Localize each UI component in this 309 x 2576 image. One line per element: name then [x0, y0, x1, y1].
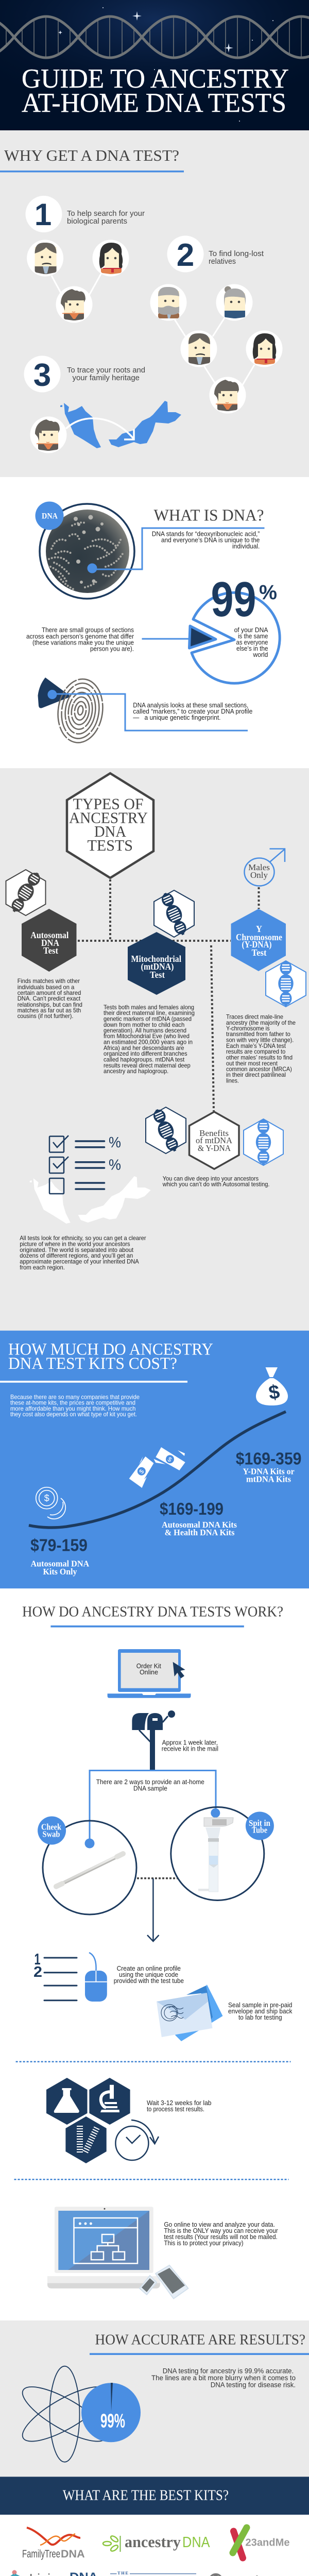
map: white ethnicity regions [30, 1176, 151, 1224]
title [22, 64, 289, 118]
icon: petri dish [40, 504, 134, 599]
icon: males only symbol [244, 849, 285, 886]
logo: Genographic Project [101, 2570, 197, 2576]
text: genome variations: across each person’s genome that differ [26, 633, 134, 640]
connector from dish to heading [88, 528, 265, 572]
icon: wedge and fingerprint [38, 676, 248, 745]
chart: 99 percent pie: else’s in the [236, 645, 268, 652]
step: create profile: 2 [33, 1964, 42, 1980]
text: genome variations [26, 626, 134, 652]
logo: 23andMe: 23andMe [245, 2537, 289, 2549]
icon: ethnicity checklist [49, 1134, 121, 1194]
logo: Living DNA [8, 2570, 98, 2576]
panel: what is DNA [0, 477, 309, 768]
logo: FamilyTreeDNA [22, 2528, 85, 2560]
text: wait for results: Wait 3-12 weeks for lab [147, 2099, 212, 2107]
text: mitochondrial description: down from mother to child each [104, 1021, 184, 1028]
heading: best kits: WHAT ARE THE BEST KITS? [63, 2488, 229, 2504]
icon: ethnicity checklist: % [109, 1157, 121, 1174]
family tree: grandparents to child [150, 284, 282, 413]
Y chromosome test hexagon: Test [251, 947, 267, 958]
text: mitochondrial description: Tests both males and females along [104, 1004, 194, 1011]
text: Y-DNA description: Traces direct male-line [226, 1013, 283, 1021]
text: autosomal description: cousins (if not further). [18, 1012, 73, 1020]
logo: Genographic Project: THE [117, 2570, 128, 2575]
text: autosomal description: relationships, but can find [18, 1001, 82, 1008]
mitochondrial test hexagon: (mtDNA) [141, 961, 174, 972]
icon: coins [36, 1487, 65, 1519]
text: DNA definition: individual. [232, 543, 260, 550]
text: DNA analysis [133, 702, 252, 721]
text: go online [164, 2221, 278, 2247]
text: accuracy: The lines are a bit more blurry when it comes to [151, 2374, 296, 2382]
autosomal test hexagon: DNA [41, 938, 59, 948]
step: order kit laptop [108, 1649, 191, 1698]
text: DNA definition [152, 531, 260, 550]
heading: types hexagon [67, 773, 153, 878]
price: autosomal only: Autosomal DNA [31, 1559, 90, 1569]
icon: autosomal DNA hexagon [6, 869, 45, 916]
Y chromosome test hexagon: Y [256, 924, 262, 934]
text: DNA analysis: a unique genetic fingerprint. [144, 714, 220, 721]
step: spit in tube [171, 1807, 274, 1900]
text: genome variations: person you are). [90, 645, 134, 652]
step: create profile: Create an online profile [117, 1965, 181, 1972]
text: mitochondrial description: an estimated 200,000 years ago in [104, 1039, 193, 1046]
step: two ways connector [90, 1770, 216, 1843]
text: ethnicity description [20, 1234, 146, 1271]
icon: benefits mtDNA hexagon [146, 1107, 186, 1154]
arrow: swab and tube to profile [137, 1878, 177, 1941]
icon: bills: $ [138, 1468, 146, 1475]
Y chromosome test hexagon: Chromosome [236, 932, 282, 942]
text: DNA analysis: DNA analysis looks at these small sections, [133, 702, 248, 709]
chart: 99 percent pie: % [259, 581, 277, 604]
chart: 99 percent circle: 99% [100, 2411, 125, 2432]
benefits hexagon: of mtDNA [196, 1136, 233, 1145]
icon: phones [140, 2265, 188, 2299]
step: two ways connector: There are 2 ways to provide an at-home [96, 1778, 204, 1786]
text: benefits description [162, 1175, 270, 1188]
panel: best kits heading band [0, 2477, 309, 2515]
text: DNA definition: and everyone’s DNA is unique to the [161, 537, 260, 544]
text: accuracy: DNA testing for disease risk. [211, 2380, 296, 2388]
icon: ethnicity checklist: % [109, 1134, 121, 1151]
reason 3: To trace your roots and [67, 366, 145, 375]
price: autosomal and health [160, 1499, 237, 1537]
heading: how much do kits cost: HOW MUCH DO ANCESTRY [8, 1340, 213, 1359]
text: accuracy: DNA testing for ancestry is 99.9% accurate. [163, 2367, 294, 2375]
text: Y-DNA description: Each male’s Y-DNA test [226, 1042, 286, 1049]
icon: stars [36, 7, 273, 122]
reason 1 [26, 196, 145, 232]
icon: atom orbits [15, 2366, 114, 2462]
panel: cost of kits [0, 1331, 309, 1588]
step: view results laptop [47, 2207, 160, 2289]
panel: how tests work [0, 1588, 309, 2320]
icon: mitochondrial DNA hexagon [154, 890, 194, 938]
reason 1: 1 [35, 197, 52, 232]
logo: FamilyTreeDNA: FamilyTree [22, 2548, 60, 2560]
icon: bills: $ [166, 1455, 173, 1464]
benefits hexagon [190, 1112, 239, 1169]
autosomal test hexagon: Autosomal [30, 930, 68, 940]
price: Y-DNA or mtDNA: mtDNA Kits [246, 1475, 291, 1484]
badge: DNA [35, 502, 64, 530]
icon: benefits Y-DNA hexagon [244, 1119, 283, 1165]
heading: types hexagon: TYPES OF [73, 795, 144, 813]
text: Y-DNA description: other males’ results to find [226, 1054, 293, 1061]
chart: 99 percent pie: is the same [238, 633, 268, 640]
text: go online: This is the ONLY way you can receive your [164, 2227, 278, 2234]
reason 3: your family heritage [72, 374, 140, 382]
heading: types hexagon: TESTS [88, 836, 133, 854]
mitochondrial test hexagon: Mitochondrial [131, 954, 181, 964]
text: DNA analysis: — [133, 714, 140, 721]
reason 2 [167, 236, 264, 273]
reason 1: biological parents [67, 217, 127, 226]
text: autosomal description: matches as far out as 5th [18, 1007, 81, 1014]
chart: rising price curve [29, 1412, 286, 1528]
chart: 99 percent circle [81, 2383, 141, 2442]
text: Y-DNA description: Y-chromosome is [226, 1025, 270, 1032]
step: create profile [33, 1950, 184, 2002]
icon: bills [129, 1447, 185, 1488]
text: genome variations: There are small groups of sections [42, 626, 134, 634]
text: mitochondrial description [104, 1004, 195, 1075]
text: cost introduction: they cost also depends on what type of kit you get. [10, 1411, 137, 1418]
text: mitochondrial description: from Mitochondrial Eve (who lived [104, 1032, 190, 1040]
mitochondrial test hexagon [128, 932, 185, 995]
text: ethnicity description: dozens of different regions, and you’ll get an [20, 1252, 133, 1259]
text: Y-DNA description: out their most recent [226, 1060, 278, 1067]
text: benefits description: which you can’t do with Autosomal testing. [162, 1181, 270, 1188]
text: mitochondrial description: results reveal direct maternal deep [104, 1062, 191, 1069]
step: mailbox: Approx 1 week later, [162, 1739, 218, 1747]
text: ethnicity description: picture of where in the world your ancestors [20, 1241, 130, 1248]
text: benefits description: You can dive deep into your ancestors [163, 1175, 259, 1182]
panel: why get a DNA test [0, 130, 309, 477]
autosomal test hexagon [22, 909, 76, 972]
text: autosomal description: Finds matches with other [18, 977, 80, 985]
text: mitochondrial description: generation). All humans descend [104, 1027, 186, 1034]
price: Y-DNA or mtDNA: Y-DNA Kits or [243, 1467, 295, 1477]
family tree: parents and child [27, 240, 129, 323]
text: mitochondrial description: called haplogroups. mtDNA test [104, 1056, 185, 1063]
chart: 99 percent pie: as everyone [236, 639, 268, 646]
icon: money bag [256, 1367, 288, 1405]
price: autosomal only [30, 1536, 90, 1577]
text: autosomal description: DNA. Can’t predict exact [18, 995, 81, 1002]
chart: 99 percent pie: world [252, 651, 268, 658]
reason 2: relatives [209, 257, 236, 266]
icon: males only symbol: Males [248, 862, 270, 872]
text: Y-DNA description: lines. [226, 1077, 239, 1084]
price: autosomal and health: Autosomal DNA Kits [162, 1520, 237, 1530]
map with heritage arrow [30, 401, 181, 453]
icon: coins: $ [44, 1493, 49, 1503]
benefits hexagon: Benefits [199, 1128, 229, 1138]
heading: how much do kits cost [8, 1340, 213, 1373]
panel: header [0, 0, 309, 130]
price: autosomal only: Kits Only [43, 1567, 77, 1577]
step: seal envelope: to lab for testing [238, 2014, 282, 2021]
connectors [78, 879, 259, 1111]
text: mitochondrial description: ancestry and haplogroup. [104, 1067, 168, 1075]
title: AT-HOME DNA TESTS [22, 88, 286, 118]
Y chromosome test hexagon: (Y-DNA) [242, 939, 272, 950]
step: mailbox [132, 1710, 218, 1770]
icon: males only symbol: Only [250, 870, 268, 880]
price: autosomal and health: $169-199 [160, 1499, 224, 1518]
chart: 99 percent pie: of your DNA [234, 626, 268, 634]
step: create profile: using the unique code [119, 1971, 178, 1978]
text: wait for results: to process test results. [147, 2106, 204, 2113]
logo: ancestryDNA [103, 2533, 210, 2552]
text: ethnicity description: originated. The world is separated into about [20, 1246, 134, 1253]
step: seal envelope [157, 1985, 293, 2041]
heading: what is DNA: WHAT IS DNA? [153, 506, 264, 524]
text: mitochondrial description: their direct maternal line, examining [104, 1009, 195, 1016]
text: cost introduction [10, 1394, 140, 1418]
logo: ancestryDNA: DNA [182, 2534, 210, 2551]
reason 3: 3 [33, 358, 51, 393]
text: autosomal description: certain amount of shared [18, 989, 81, 996]
badge: DNA: DNA [42, 512, 58, 520]
step: cheek swab: Cheek [41, 1822, 61, 1832]
text: Y-DNA description: in their direct patrilineal [226, 1071, 286, 1078]
text: cost introduction: Because there are so many companies that provide [10, 1394, 140, 1401]
reason 2: To find long-lost [209, 249, 264, 258]
text: mitochondrial description: Africa) and her descendants are [104, 1044, 184, 1052]
text: accuracy [151, 2367, 296, 2388]
price: autosomal only: $79-159 [30, 1536, 88, 1555]
step: spit in tube: Spit in [249, 1818, 270, 1828]
text: ethnicity description: All tests look for ethnicity, so you can get a clearer [20, 1234, 146, 1242]
reason 1: To help search for your [67, 209, 145, 218]
price: Y-DNA or mtDNA: $169-359 [236, 1449, 302, 1468]
heading: types hexagon: ANCESTRY [69, 809, 148, 827]
step: create profile: provided with the test tube [114, 1977, 184, 1985]
icon: Y-DNA hexagon [266, 961, 306, 1007]
icon: DNA helix [0, 16, 309, 58]
step: seal envelope: envelope and ship back [228, 2008, 293, 2015]
text: autosomal description: individuals based on a [18, 984, 75, 991]
text: Y-DNA description: son with very little change). [226, 1037, 294, 1044]
heading: how much do kits cost: DNA TEST KITS COST? [8, 1354, 177, 1373]
text: Y-DNA description [226, 1013, 296, 1084]
text: cost introduction: these at-home kits, the prices are competitive and [10, 1399, 135, 1406]
text: autosomal description [18, 977, 82, 1020]
text: ethnicity description: approximate percentage of your inherited DNA [20, 1258, 139, 1265]
reason 2: 2 [177, 238, 194, 273]
Y chromosome test hexagon [231, 909, 286, 971]
step: cheek swab [38, 1817, 136, 1914]
text: cost introduction: more affordable than you might think. How much [10, 1405, 135, 1412]
panel: how accurate [0, 2320, 309, 2477]
heading: how accurate are results: HOW ACCURATE ARE RESULTS? [95, 2332, 305, 2348]
text: DNA analysis: called “markers,” to create your DNA profile [133, 708, 252, 715]
logo: ancestryDNA: ancestry [125, 2533, 181, 2551]
text: mitochondrial description: organized into different branches [104, 1050, 187, 1057]
step: mailbox: receive kit in the mail [162, 1745, 218, 1753]
logo: 23andMe [233, 2528, 289, 2558]
text: go online: This is to protect your privacy) [164, 2240, 244, 2247]
step: order kit laptop: Order Kit [136, 1662, 161, 1670]
price: autosomal and health: & Health DNA Kits [165, 1528, 235, 1537]
reason 3 [24, 355, 145, 393]
step: lab processing icons [46, 2078, 130, 2163]
step: cheek swab: Swab [42, 1829, 60, 1839]
icon: clock [115, 2120, 159, 2160]
text: ethnicity description: from each region. [20, 1264, 65, 1271]
text: Y-DNA description: common ancestor (MRCA) [226, 1065, 292, 1073]
step: two ways connector: DNA sample [133, 1785, 167, 1792]
price: Y-DNA or mtDNA [236, 1449, 302, 1484]
text: mitochondrial description: genetic markers of mtDNA (passed [104, 1015, 192, 1023]
heading: types hexagon: DNA [94, 822, 127, 840]
text: go online: Go online to view and analyze your data. [164, 2221, 275, 2228]
icon: money bag: $ [267, 1381, 281, 1404]
mitochondrial test hexagon: Test [150, 970, 165, 980]
text: DNA definition: DNA stands for “deoxyribonucleic acid,” [152, 531, 260, 538]
step: order kit laptop: Online [140, 1668, 158, 1676]
text: genome variations: (these variations make you the unique [32, 639, 134, 646]
heading: how do tests work: HOW DO ANCESTRY DNA TESTS WORK? [22, 1604, 283, 1620]
chart: 99 percent pie [142, 572, 280, 683]
heading: why get a DNA test: WHY GET A DNA TEST? [4, 146, 179, 164]
text: Y-DNA description: results are compared to [226, 1048, 286, 1055]
step: create profile: 1 [34, 1950, 40, 1968]
panel: types of ancestry DNA tests [0, 768, 309, 1331]
text: wait for results [147, 2099, 212, 2113]
autosomal test hexagon: Test [43, 945, 58, 956]
chart: 99 percent pie: 99 [211, 572, 256, 627]
text: Y-DNA description: transmitted from father to [226, 1030, 290, 1038]
text: go online: test results (Your results will not be mailed. [164, 2233, 278, 2241]
text: Y-DNA description: ancestry (the majority of the [226, 1019, 296, 1026]
step: spit in tube: Tube [252, 1825, 267, 1835]
logo: FamilyTreeDNA: DNA [61, 2548, 85, 2560]
benefits hexagon: & Y-DNA [198, 1143, 231, 1153]
step: seal envelope: Seal sample in pre-paid [228, 2002, 292, 2009]
title: GUIDE TO ANCESTRY [22, 64, 289, 94]
